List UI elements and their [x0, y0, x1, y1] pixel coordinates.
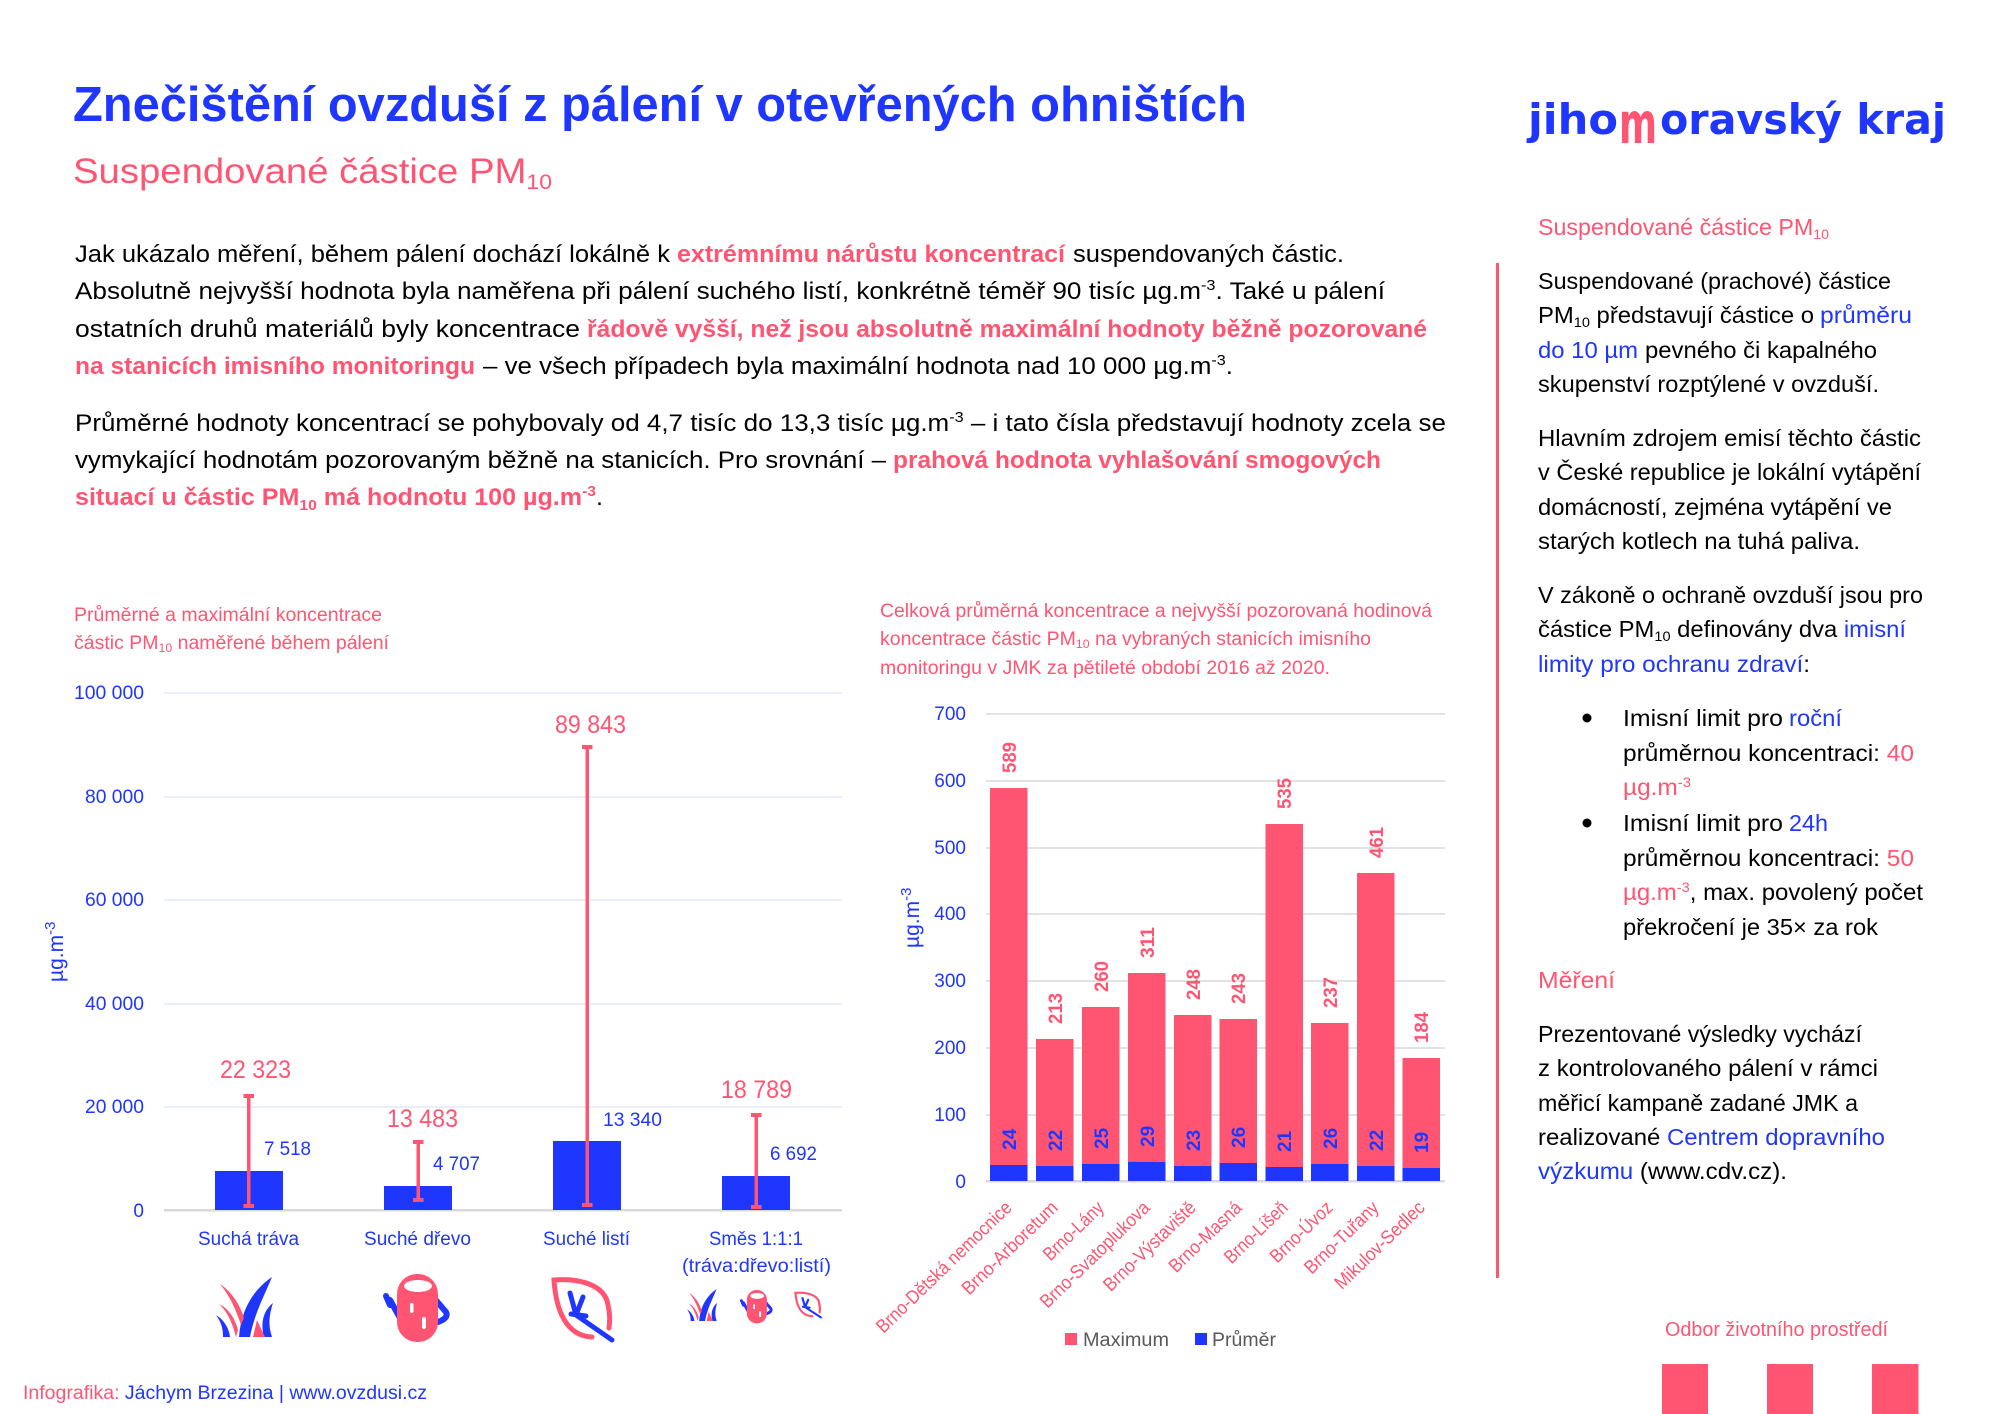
sidebar: limits bullet list: Imisní limit pro	[1623, 705, 1783, 731]
category labels: Směs 1:1:1	[709, 1229, 803, 1250]
left chart caption: naměřené během pálení	[172, 633, 390, 654]
station labels: Brno-Úvoz	[1265, 1197, 1337, 1267]
station labels: Brno-Dětská nemocnice	[872, 1197, 1016, 1338]
intro text block: Jak ukázalo měření, během pálení dochází lokálně k	[75, 241, 671, 268]
mean value labels: 24	[1000, 1128, 1021, 1150]
intro text block: extrémnímu nárůstu koncentrací	[677, 241, 1066, 268]
right chart caption: koncentrace částic PM	[880, 629, 1071, 650]
mean value labels: 6 692	[770, 1144, 817, 1165]
left chart y axis	[42, 683, 842, 1222]
left chart caption	[74, 605, 390, 655]
right chart y axis	[898, 704, 1445, 1193]
maximum bars	[990, 788, 1440, 1181]
mean value labels: 22	[1046, 1130, 1067, 1151]
station labels: Mikulov-Sedlec	[1331, 1197, 1429, 1294]
sidebar: limits bullet list: průměrnou koncentraci: 40	[1623, 740, 1914, 766]
station labels: Brno-Arboretum	[958, 1197, 1062, 1299]
intro text block: prahová hodnota vyhlašování smogových	[893, 447, 1381, 474]
right chart y axis: 0	[955, 1172, 966, 1193]
category labels: Suchá tráva	[198, 1229, 299, 1250]
left chart y axis: 80 000	[85, 787, 144, 808]
logo: jihomoravský kraj: jiho	[1526, 95, 1618, 144]
right chart caption	[880, 601, 1432, 679]
sidebar: particulate matter text: 10	[1813, 226, 1829, 242]
right chart caption: 10	[1076, 637, 1090, 651]
maximum value labels: 18 789	[721, 1076, 792, 1104]
mean value labels: 26	[1321, 1128, 1342, 1149]
intro text block: má hodnotu 100 µg.m	[317, 484, 582, 511]
maximum value labels: 461	[1367, 827, 1388, 858]
mean bars	[215, 1141, 790, 1210]
right chart y axis: 600	[934, 771, 966, 792]
sidebar: measurement section: realizované Centrem dopravního	[1538, 1124, 1885, 1150]
station labels: Brno-Tuřany	[1301, 1197, 1384, 1279]
mean value labels: 25	[1092, 1127, 1113, 1149]
icon: small leaf	[795, 1293, 821, 1317]
department label: Odbor životního prostředí	[1665, 1319, 1888, 1341]
sidebar: measurement section: výzkumu (www.cdv.cz).	[1538, 1158, 1787, 1184]
sidebar: measurement section	[1538, 967, 1885, 1184]
sidebar: measurement section: Měření	[1538, 967, 1616, 993]
right chart y axis: 400	[934, 904, 966, 925]
sidebar: particulate matter text: imisní	[1844, 616, 1907, 642]
maximum error bars	[244, 745, 762, 1209]
intro text block: .	[1226, 353, 1233, 380]
intro text block: -3	[1211, 352, 1226, 369]
sidebar: particulate matter text: Suspendované (prachové) částice	[1538, 268, 1891, 294]
icon: small log	[741, 1290, 771, 1323]
left chart caption: částic PM	[74, 633, 156, 654]
category labels: Suché dřevo	[364, 1229, 471, 1250]
title: Znečištění ovzduší z pálení v otevřených ohništích	[73, 78, 1247, 132]
station labels	[872, 1197, 1429, 1338]
station labels: Brno-Svatoplukova	[1036, 1197, 1155, 1313]
category labels: (tráva:dřevo:listí)	[682, 1256, 831, 1277]
sidebar: particulate matter text: do 10 µm	[1538, 337, 1638, 363]
right chart y axis: -3	[898, 888, 915, 901]
icon: dry wood log	[386, 1274, 447, 1342]
intro text block: -3	[1201, 277, 1216, 294]
maximum value labels: 13 483	[387, 1105, 458, 1133]
mean value labels	[1000, 1126, 1433, 1153]
mean value labels	[264, 1110, 817, 1175]
maximum value labels: 184	[1412, 1012, 1433, 1043]
right chart y axis: 700	[934, 704, 966, 725]
right chart caption: monitoringu v JMK za pětileté období 2016 až 2020.	[880, 658, 1330, 679]
logo: jihomoravský kraj: oravský kraj	[1660, 95, 1946, 144]
sidebar: particulate matter text: představují částice o	[1590, 302, 1814, 328]
sidebar divider line	[1496, 263, 1499, 1278]
sidebar: particulate matter text: V zákoně o ochraně ovzduší jsou pro	[1538, 582, 1923, 608]
maximum value labels: 213	[1046, 993, 1067, 1024]
mean value labels: 19	[1412, 1132, 1433, 1153]
sidebar: limits bullet list: µg.m	[1623, 774, 1675, 800]
chart: monitoring stations	[872, 704, 1445, 1351]
left chart caption: Průměrné a maximální koncentrace	[74, 605, 382, 626]
sidebar: limits bullet list: -3	[1677, 879, 1690, 895]
right chart y axis: 100	[934, 1105, 966, 1126]
maximum value labels	[1000, 742, 1433, 1043]
left chart y axis: 100 000	[74, 683, 144, 704]
intro text block: Průměrné hodnoty koncentrací se pohybovaly od 4,7 tisíc do 13,3 tisíc µg.m	[75, 410, 883, 437]
sidebar: particulate matter text: v České republice je lokální vytápění	[1538, 458, 1922, 485]
right chart y axis: 200	[934, 1038, 966, 1059]
department logo squares	[1662, 1364, 1918, 1414]
sidebar: particulate matter text: částice PM	[1538, 616, 1650, 642]
intro text block: – i tato čísla představují hodnoty zcela se	[964, 410, 1446, 437]
sidebar: particulate matter text: domácností, zejména vytápění ve	[1538, 494, 1892, 520]
station labels: Brno-Masná	[1165, 1197, 1247, 1277]
intro text block: . Také u pálení	[1216, 278, 1385, 305]
right chart caption: na vybraných stanicích imisního	[1090, 629, 1371, 650]
sidebar: particulate matter text: starých kotlech na tuhá paliva.	[1538, 528, 1860, 554]
left chart caption: 10	[159, 641, 173, 655]
intro text block: situací u částic PM	[75, 484, 299, 511]
footer credit: Infografika: Jáchym Brzezina | www.ovzdusi.cz	[23, 1383, 427, 1404]
logo: jihomoravský kraj	[1526, 89, 1946, 157]
intro text block: – ve všech případech byla maximální hodnota nad 10 000 µg.m	[483, 353, 1159, 380]
category labels	[198, 1229, 831, 1277]
intro text block: -3	[949, 409, 964, 426]
intro text block: řádově vyšší, než jsou absolutně maximální hodnoty běžně pozorované	[587, 316, 1427, 343]
subtitle: Suspendované částice PM	[73, 152, 487, 191]
sidebar: limits bullet list: překročení je 35× za rok	[1623, 914, 1879, 940]
mean bars	[990, 1162, 1440, 1181]
station labels: Brno-Výstaviště	[1100, 1197, 1200, 1296]
maximum value labels: 243	[1229, 973, 1250, 1004]
sidebar: particulate matter text: definovány dva	[1671, 616, 1844, 642]
sidebar: limits bullet list: 24h	[1789, 810, 1828, 836]
sidebar: particulate matter text: Suspendované částice PM	[1538, 214, 1810, 240]
sidebar: measurement section: měřicí kampaně zadané JMK a	[1538, 1090, 1858, 1116]
right chart y axis: 500	[934, 838, 966, 859]
left chart y axis: 0	[133, 1201, 144, 1222]
sidebar: limits bullet list: , max. povolený počet	[1690, 879, 1924, 905]
sidebar: measurement section: Prezentované výsledky vychází	[1538, 1021, 1863, 1047]
sidebar: particulate matter text	[1538, 214, 1923, 677]
mean value labels: 4 707	[433, 1154, 480, 1175]
legend	[1065, 1330, 1277, 1351]
mean value labels: 29	[1138, 1126, 1159, 1147]
sidebar: particulate matter text: 10	[1654, 628, 1671, 644]
sidebar: limits bullet list	[1582, 705, 1924, 940]
station labels: Brno-Líšeň	[1220, 1197, 1292, 1268]
icon: dry leaf	[554, 1280, 612, 1340]
right chart caption: Celková průměrná koncentrace a nejvyšší pozorovaná hodinová	[880, 601, 1432, 622]
left chart y axis: -3	[42, 922, 59, 935]
right chart y axis: 300	[934, 971, 966, 992]
sidebar: particulate matter text: skupenství rozptýlené v ovzduší.	[1538, 371, 1879, 397]
left chart y axis: 40 000	[85, 994, 144, 1015]
intro text block: .	[596, 484, 603, 511]
sidebar: limits bullet list: průměrnou koncentraci: 50	[1623, 845, 1914, 871]
intro text block: vymykající hodnotám pozorovaným běžně na stanicích. Pro srovnání –	[75, 447, 887, 474]
intro text block: suspendovaných částic.	[1073, 241, 1344, 268]
sidebar: particulate matter text: Hlavním zdrojem emisí těchto částic	[1538, 425, 1921, 451]
sidebar: limits bullet list: roční	[1789, 705, 1843, 731]
maximum value labels: 260	[1092, 961, 1113, 992]
intro text block: -3	[582, 483, 596, 500]
icon: small grass	[687, 1289, 717, 1321]
station labels: Brno-Lány	[1039, 1197, 1109, 1265]
intro text block	[75, 241, 1446, 514]
left chart y axis: 60 000	[85, 890, 144, 911]
intro text block: na stanicích imisního monitoringu	[75, 353, 475, 380]
sidebar: limits bullet list: µg.m	[1623, 879, 1677, 905]
sidebar: particulate matter text: průměru	[1820, 302, 1912, 328]
sidebar: particulate matter text: pevného či kapalného	[1645, 337, 1877, 363]
legend: Průměr	[1212, 1330, 1277, 1351]
sidebar: limits bullet list: Imisní limit pro	[1623, 810, 1783, 836]
maximum value labels: 311	[1138, 927, 1159, 958]
subtitle: 10	[526, 171, 552, 194]
maximum value labels	[220, 711, 792, 1133]
maximum value labels: 22 323	[220, 1056, 291, 1084]
maximum value labels: 237	[1321, 977, 1342, 1008]
sidebar: particulate matter text: limity pro ochranu zdraví :	[1538, 651, 1810, 677]
left chart y axis: µg.m	[45, 935, 68, 982]
intro text block: Absolutně nejvyšší hodnota byla naměřena při pálení suchého listí, konkrétně téměř 90 tisíc µg.m	[75, 278, 1109, 305]
mean value labels: 7 518	[264, 1139, 311, 1160]
intro text block: ostatních druhů materiálů byly koncentrace	[75, 316, 580, 343]
left chart y axis: 20 000	[85, 1097, 144, 1118]
mean value labels: 21	[1275, 1130, 1296, 1152]
legend: Maximum	[1083, 1330, 1169, 1351]
mean value labels: 23	[1184, 1130, 1205, 1151]
maximum value labels: 248	[1184, 969, 1205, 1000]
category labels: Suché listí	[543, 1229, 631, 1250]
sidebar: limits bullet list: -3	[1678, 774, 1691, 790]
mean value labels: 13 340	[603, 1110, 662, 1131]
maximum value labels: 89 843	[555, 711, 626, 739]
icon: dry grass	[216, 1277, 273, 1337]
maximum value labels: 535	[1275, 778, 1296, 809]
sidebar: particulate matter text: 10	[1574, 314, 1590, 330]
mean value labels: 26	[1229, 1127, 1250, 1148]
logo: jihomoravský kraj: m	[1619, 89, 1657, 157]
maximum value labels: 589	[1000, 742, 1021, 773]
mean value labels: 22	[1367, 1130, 1388, 1151]
sidebar: particulate matter text: PM	[1538, 302, 1572, 328]
right chart y axis: µg.m	[901, 901, 924, 948]
chart: burning concentrations	[42, 683, 842, 1277]
sidebar: measurement section: z kontrolovaného pálení v rámci	[1538, 1055, 1878, 1081]
intro text block: 10	[299, 497, 317, 514]
